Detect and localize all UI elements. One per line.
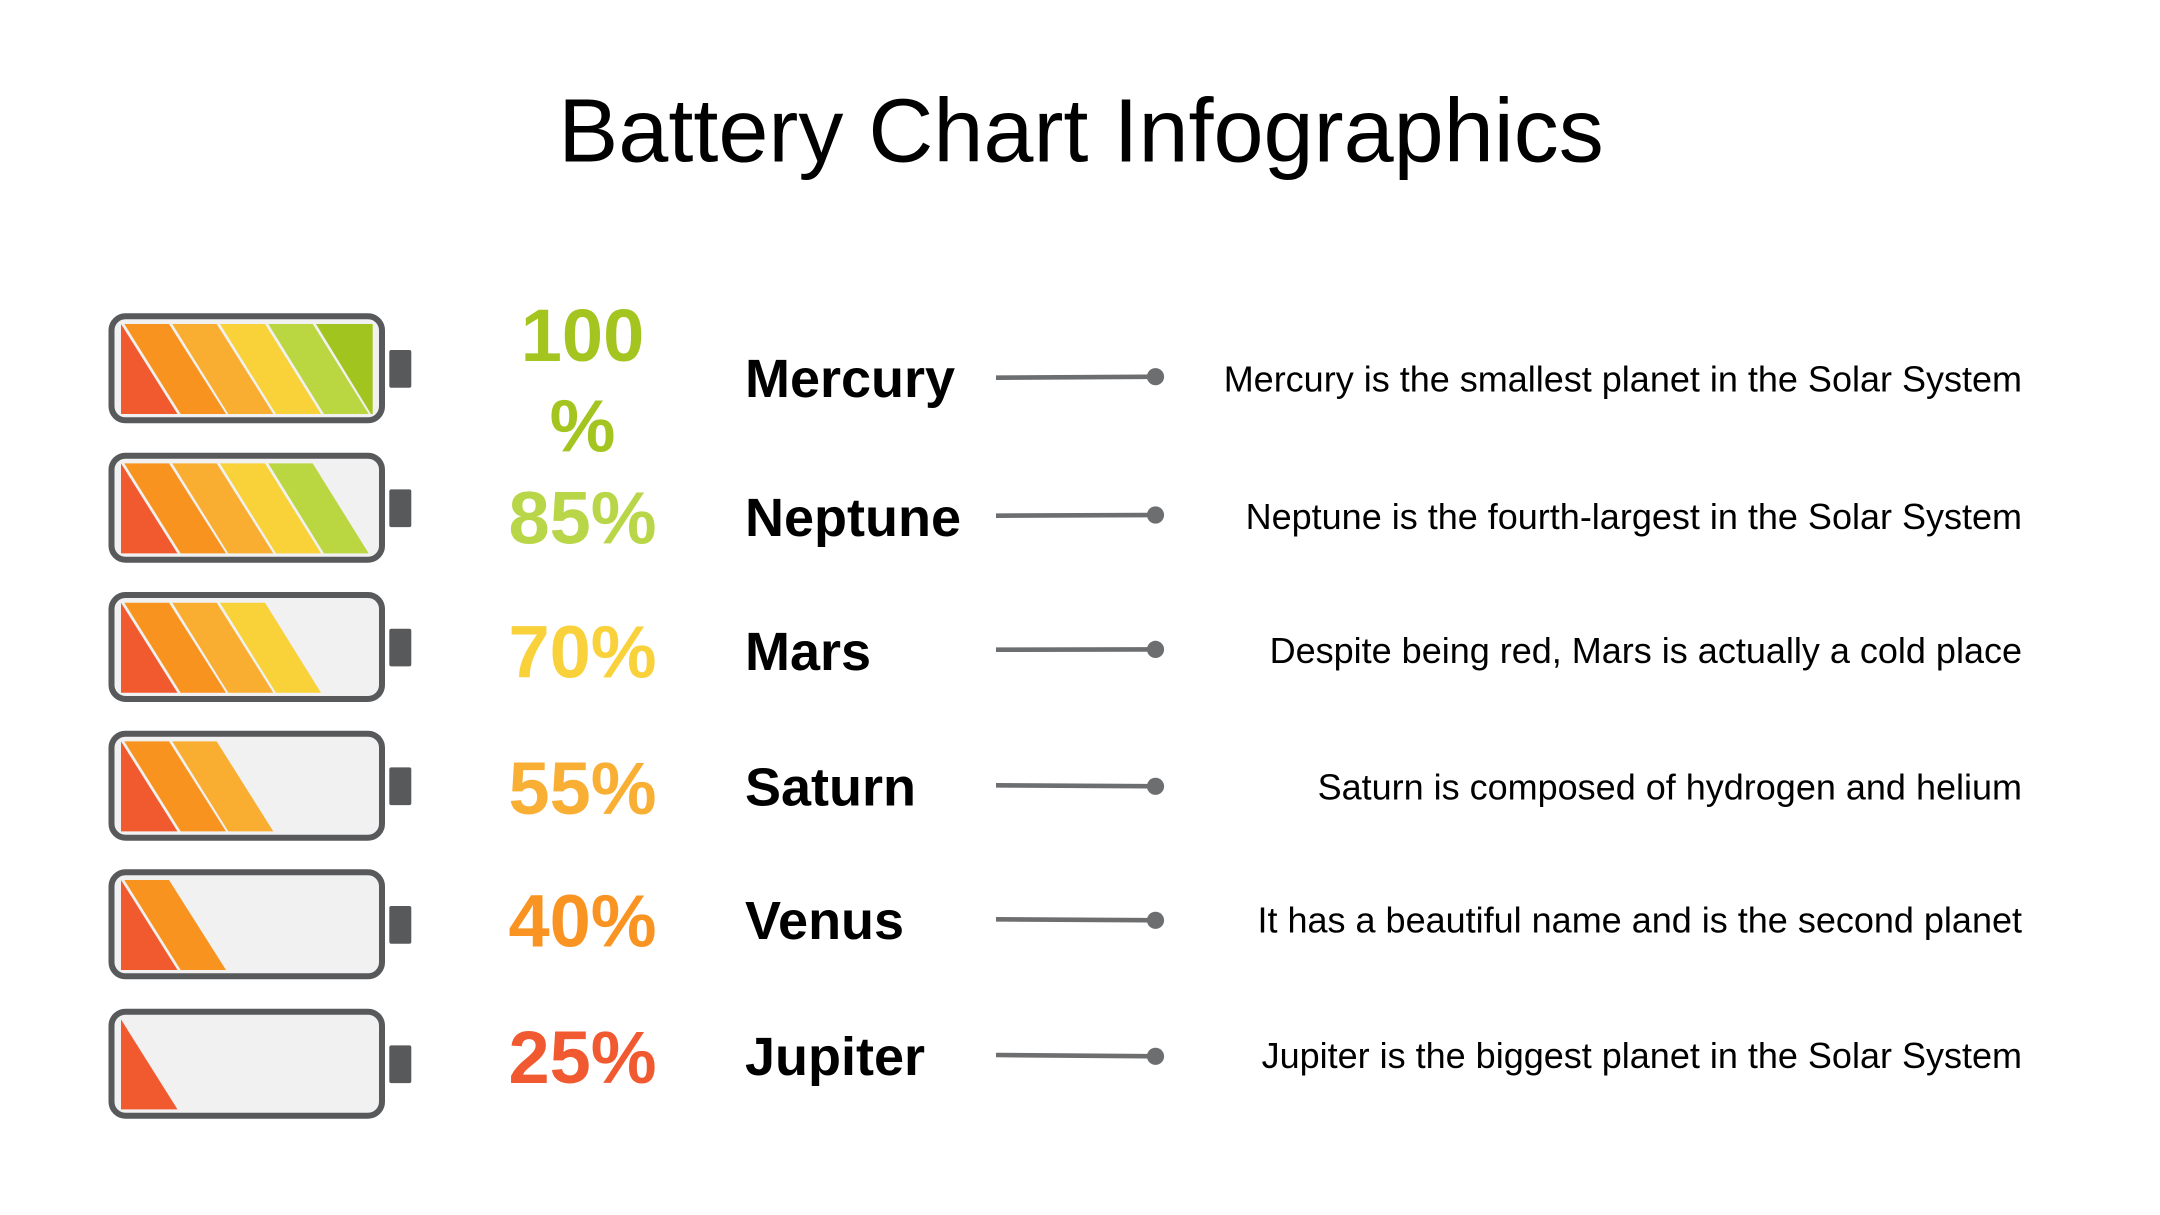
description: Mercury: Mercury is the smallest planet in the Solar System: [1224, 358, 2022, 400]
connector: Jupiter: [996, 1048, 1164, 1065]
connector: Mercury: [996, 368, 1164, 385]
icon: battery 55%: [112, 734, 411, 838]
percentage: 100%: %: [550, 384, 615, 468]
row: Mercury: [112, 294, 2022, 468]
icon: battery 70%: [112, 595, 411, 699]
icon: battery 100%: [112, 316, 411, 420]
description: Jupiter: Jupiter is the biggest planet in the Solar System: [1262, 1035, 2022, 1076]
connector: Venus: [996, 912, 1164, 929]
description: Mars: Despite being red, Mars is actually a cold place: [1270, 630, 2022, 671]
percentage: 25%: 25%: [508, 1016, 657, 1099]
name: Venus: Venus: [745, 891, 904, 951]
row: Jupiter: [112, 1012, 2022, 1116]
name: Mercury: Mercury: [745, 349, 955, 409]
connector: Mars: [996, 641, 1164, 658]
description: Venus: It has a beautiful name and is the second planet: [1257, 900, 2022, 940]
icon: battery 25%: [112, 1012, 411, 1116]
name: Mars: Mars: [745, 622, 871, 682]
percentage: 40%: 40%: [508, 880, 657, 962]
icon: battery 85%: [112, 456, 411, 560]
connector: Saturn: [996, 778, 1164, 795]
row: Venus: [112, 872, 2022, 976]
row: Mars: [112, 595, 2022, 699]
connector: Neptune: [996, 506, 1164, 524]
percentage: 85%: 85%: [508, 476, 657, 560]
description: Neptune: Neptune is the fourth-largest in the Solar System: [1246, 496, 2022, 537]
icon: battery 40%: [112, 872, 411, 976]
name: Jupiter: Jupiter: [745, 1027, 925, 1087]
row: Saturn: [112, 734, 2022, 838]
percentage: 70%: 70%: [508, 611, 657, 694]
row: Neptune: [112, 456, 2022, 560]
description: Saturn: Saturn is composed of hydrogen and helium: [1318, 766, 2022, 808]
percentage: 55%: 55%: [508, 747, 657, 830]
percentage: 100%: 100: [521, 294, 644, 377]
title: Battery Chart Infographics: [558, 82, 1604, 182]
name: Neptune: Neptune: [745, 488, 961, 548]
name: Saturn: Saturn: [745, 758, 916, 818]
